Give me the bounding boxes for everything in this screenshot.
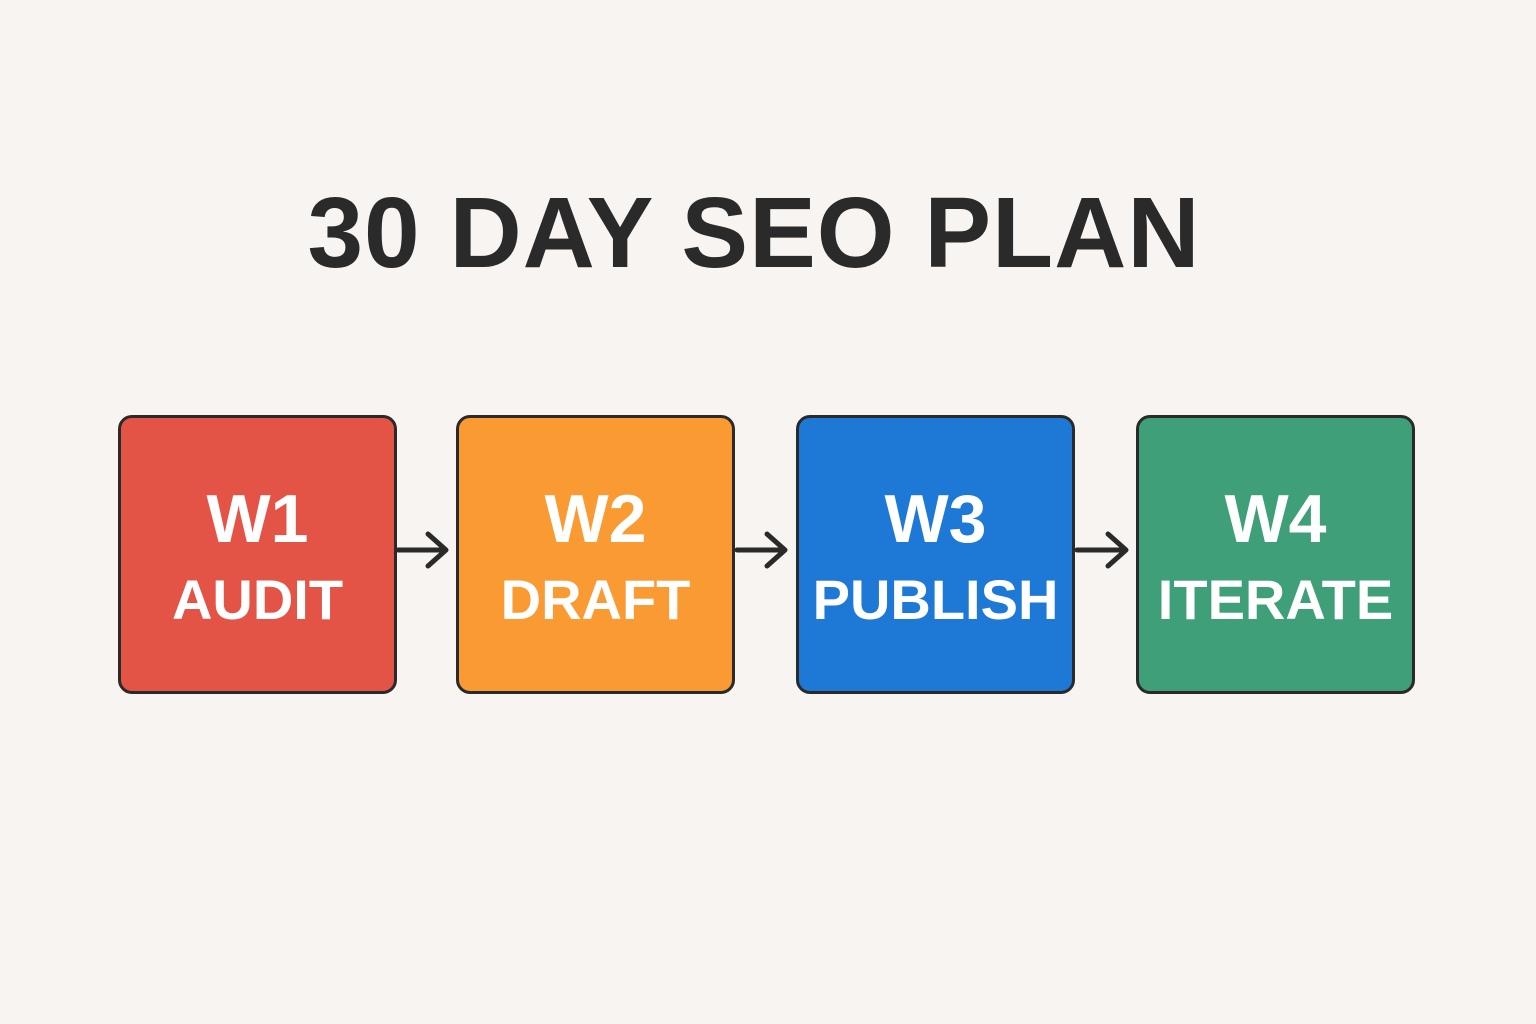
box: W1 audit: W1 (206, 481, 308, 557)
box: W4 iterate (1136, 415, 1415, 694)
arrow 2 (737, 534, 785, 566)
box: W1 audit (118, 415, 397, 694)
box: W4 iterate: ITERATE (1158, 568, 1393, 631)
title: 30 DAY SEO PLAN (307, 177, 1201, 289)
box: W4 iterate: W4 (1224, 481, 1326, 557)
arrow 3 (1077, 534, 1126, 566)
box: W2 draft: W2 (544, 481, 646, 557)
box: W1 audit: AUDIT (172, 568, 343, 631)
arrow 1 (398, 534, 446, 566)
box: W3 publish: PUBLISH (813, 568, 1058, 631)
box: W2 draft (456, 415, 735, 694)
box: W3 publish (796, 415, 1075, 694)
box: W3 publish: W3 (884, 481, 986, 557)
box: W2 draft: DRAFT (501, 568, 690, 631)
